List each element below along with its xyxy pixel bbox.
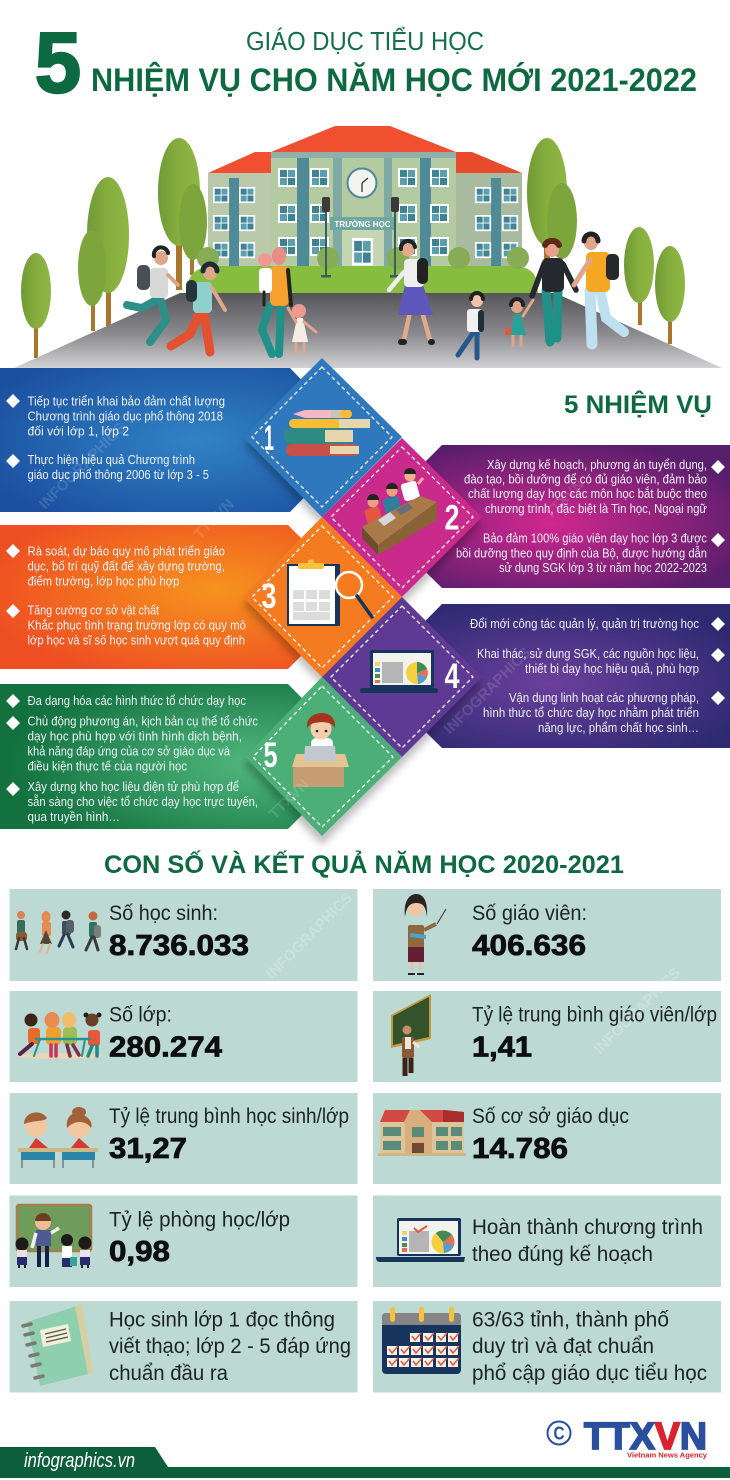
task 3 text: Khắc phục tình trạng trường lớp có quy mô bbox=[28, 618, 246, 632]
big number 5: 5 bbox=[35, 16, 81, 111]
card: số cơ sở giáo dục bbox=[373, 1093, 721, 1184]
footer bar bbox=[0, 1447, 730, 1478]
task 5 text bbox=[28, 693, 258, 824]
value: 31,27 bbox=[109, 1133, 187, 1165]
value: 280.274 bbox=[109, 1032, 222, 1064]
main title: NHIỆM VỤ CHO NĂM HỌC MỚI 2021-2022 bbox=[91, 62, 697, 98]
school sign bbox=[330, 217, 395, 230]
card: số lớp bbox=[10, 991, 358, 1082]
text: Tỷ lệ phòng học/lớp bbox=[109, 1208, 290, 1232]
task 4 text: Khai thác, sử dụng SGK, các nguồn học liệu, bbox=[477, 646, 699, 661]
subtitle: GIÁO DỤC TIỂU HỌC bbox=[246, 26, 484, 56]
number 4: 4 bbox=[444, 657, 460, 696]
value: 406.636 bbox=[472, 930, 586, 962]
bullets bbox=[6, 544, 20, 618]
logo: TTXVN bbox=[548, 1416, 707, 1460]
value: 1,41 bbox=[472, 1032, 532, 1064]
bullets bbox=[711, 460, 725, 547]
text: Hoàn thành chương trình bbox=[472, 1215, 703, 1239]
trees bbox=[21, 138, 685, 358]
person: father in yellow bbox=[574, 234, 624, 344]
bullets bbox=[711, 617, 725, 705]
person: running boy bbox=[127, 247, 178, 342]
value: 0,98 bbox=[109, 1236, 170, 1268]
watermarks on cards bbox=[263, 889, 684, 1058]
bullets bbox=[6, 694, 20, 796]
lawn bbox=[187, 266, 538, 293]
number 2: 2 bbox=[444, 498, 460, 538]
text: Học sinh lớp 1 đọc thông bbox=[109, 1308, 335, 1332]
person: boy with backpack bbox=[171, 264, 225, 352]
task 3 text: điểm trường, lớp học phù hợp bbox=[28, 574, 180, 588]
text: viết thạo; lớp 2 - 5 đáp ứng bbox=[109, 1334, 351, 1358]
watermarks bbox=[36, 419, 588, 823]
icon: notebook bbox=[23, 1304, 93, 1386]
task 1 text: đối với lớp 1, lớp 2 bbox=[28, 424, 129, 438]
diamond 4: laptop bbox=[322, 597, 482, 757]
value: 14.786 bbox=[472, 1133, 568, 1165]
door bbox=[352, 238, 373, 266]
icon: people at desk bbox=[362, 468, 437, 555]
watermarks: TTXVN bbox=[266, 776, 313, 823]
icon: teacher and kids at board bbox=[16, 1205, 92, 1268]
watermarks: TTXVN bbox=[191, 496, 238, 543]
task 5 text: dạy học phù hợp với tình hình dịch bệnh, bbox=[28, 728, 242, 744]
watermarks: INFOGRAPHICS bbox=[441, 644, 534, 738]
card: 63/63 tỉnh bbox=[373, 1301, 721, 1392]
street lamps bbox=[321, 197, 400, 278]
diamond 1: books bbox=[243, 358, 402, 517]
text: theo đúng kế hoạch bbox=[472, 1242, 653, 1266]
task 3 text: dục, bố trí quỹ đất để xây dựng trường, bbox=[28, 558, 225, 574]
person: boy from behind bbox=[458, 293, 484, 358]
text: chuẩn đầu ra bbox=[109, 1361, 228, 1385]
title bbox=[35, 16, 697, 111]
person: father in black bbox=[532, 241, 576, 342]
task 3 text: lớp học và sĩ số học sinh vượt quá quy định bbox=[28, 632, 245, 648]
card: số giáo viên bbox=[373, 889, 721, 981]
person: woman with skirt bbox=[389, 241, 433, 342]
task 5 text: điều kiện thực tế của người học bbox=[28, 758, 187, 774]
school sign: TRƯỜNG HỌC bbox=[334, 220, 391, 229]
icon: teacher bbox=[405, 894, 446, 974]
diamond 5: boy with laptop bbox=[245, 677, 402, 836]
wordmark: TTXVN bbox=[584, 1416, 707, 1458]
task 4 text: Vận dụng linh hoạt các phương pháp, bbox=[509, 690, 699, 705]
text: duy trì và đạt chuẩn bbox=[472, 1334, 654, 1358]
task 3 text: Rà soát, dự báo quy mô phát triển giáo bbox=[28, 544, 225, 558]
clock bbox=[348, 168, 376, 198]
task 5 text: Đa dạng hóa các hình thức tổ chức dạy học bbox=[28, 693, 246, 708]
text bbox=[472, 1215, 703, 1266]
watermarks on cards: INFOGRAPHICS bbox=[263, 889, 356, 983]
task 4 text bbox=[470, 616, 699, 735]
icon: laptop with chart bbox=[376, 1218, 465, 1262]
heading: con số và kết quả: CON SỐ VÀ KẾT QUẢ NĂM HỌC 2020-2021 bbox=[104, 849, 624, 879]
person: little girl bbox=[288, 304, 316, 354]
watermarks: INFOGRAPHICS bbox=[36, 419, 129, 513]
task 5 text: khả năng đáp ứng của cơ sở giáo dục và bbox=[28, 744, 231, 758]
panel: task 1 blue bbox=[0, 368, 360, 512]
copyright mark bbox=[548, 1422, 570, 1444]
text: Số giáo viên: bbox=[472, 901, 587, 925]
icon: teacher and blackboard bbox=[391, 994, 431, 1076]
icon: books bbox=[284, 410, 370, 456]
heading: 5 nhiệm vụ: 5 NHIỆM VỤ bbox=[564, 389, 712, 419]
task 1 text: Chương trình giáo dục phổ thông 2018 bbox=[28, 408, 223, 424]
task 5 text: qua truyền hình… bbox=[28, 809, 120, 824]
task 4 text: Đổi mới công tác quản lý, quản trị trường học bbox=[470, 616, 699, 631]
card: số học sinh bbox=[10, 889, 358, 981]
task 1 text bbox=[28, 394, 225, 482]
card: tỷ lệ giáo viên/lớp bbox=[373, 991, 721, 1082]
icon: students walking bbox=[16, 910, 101, 953]
task 4 text: thiết bị dạy học hiệu quả, phù hợp bbox=[525, 661, 699, 676]
icon: clipboard and magnifier bbox=[287, 559, 372, 626]
text bbox=[472, 1308, 707, 1385]
bushes bbox=[197, 247, 529, 269]
task 5 text: Chủ động phương án, kịch bản cụ thể tổ chức bbox=[28, 714, 258, 728]
person: small girl in teal bbox=[505, 299, 533, 346]
icon: pupils at desks bbox=[18, 1107, 98, 1168]
agency name: Vietnam News Agency bbox=[627, 1452, 707, 1460]
illustration: school and families bbox=[14, 126, 722, 368]
text bbox=[109, 1308, 351, 1385]
number 1: 1 bbox=[264, 419, 274, 458]
bullets bbox=[6, 394, 20, 468]
website: infographics.vn bbox=[24, 1450, 135, 1472]
card: tỷ lệ phòng học/lớp bbox=[10, 1196, 358, 1287]
watermarks: TTXVN bbox=[541, 476, 588, 523]
task 1 text: Thực hiện hiệu quả Chương trình bbox=[28, 452, 195, 467]
text: Số lớp: bbox=[109, 1002, 172, 1026]
copyright mark: C bbox=[554, 1424, 564, 1444]
task 1 text: giáo dục phổ thông 2006 từ lớp 3 - 5 bbox=[28, 467, 209, 482]
icon: kids at table bbox=[16, 1012, 104, 1059]
text: Tỷ lệ trung bình học sinh/lớp bbox=[109, 1104, 349, 1128]
text: phổ cập giáo dục tiểu học bbox=[472, 1361, 707, 1385]
diamond 2: teachers at desk bbox=[322, 438, 482, 597]
card: hoàn thành chương trình bbox=[373, 1196, 721, 1287]
panel: task 3 orange bbox=[0, 525, 360, 669]
panel: task 4 purple bbox=[370, 604, 730, 748]
person: mother carrying child bbox=[258, 247, 291, 354]
icon: laptop with chart bbox=[360, 650, 438, 693]
panel: task 5 green bbox=[0, 684, 360, 829]
diamond shadows bbox=[243, 365, 482, 845]
card: tỷ lệ học sinh/lớp bbox=[10, 1093, 358, 1184]
school building bbox=[208, 126, 522, 266]
text: Số học sinh: bbox=[109, 901, 218, 925]
diamond 3: clipboard bbox=[243, 517, 402, 677]
task 5 text: Xây dựng kho học liệu điện tử phù hợp để bbox=[28, 779, 239, 794]
icon: calendar bbox=[382, 1307, 461, 1374]
task 4 text: hình thức tổ chức dạy học nhằm phát triển bbox=[483, 705, 699, 720]
text: 63/63 tỉnh, thành phố bbox=[472, 1308, 669, 1332]
icon: school bbox=[378, 1110, 466, 1156]
card: học sinh lớp 1 bbox=[10, 1301, 358, 1392]
number 3: 3 bbox=[262, 577, 276, 616]
task 5 text: sẵn sàng cho việc tổ chức dạy học trực tuyến, bbox=[28, 794, 258, 809]
panel: task 2 magenta bbox=[370, 445, 730, 588]
text: Số cơ sở giáo dục bbox=[472, 1104, 629, 1128]
watermarks on cards: INFOGRAPHICS bbox=[591, 964, 684, 1058]
task 3 text bbox=[28, 544, 246, 648]
icon: boy at desk bbox=[292, 713, 349, 787]
task 1 text: Tiếp tục triển khai bảo đảm chất lượng bbox=[28, 394, 225, 408]
task 2 text bbox=[456, 457, 707, 575]
value: 8.736.033 bbox=[109, 930, 249, 962]
task 3 text: Tăng cường cơ sở vật chất bbox=[28, 602, 159, 618]
task 4 text: năng lực, phẩm chất học sinh… bbox=[538, 720, 699, 735]
road bbox=[14, 293, 722, 368]
number 5: 5 bbox=[264, 736, 278, 775]
